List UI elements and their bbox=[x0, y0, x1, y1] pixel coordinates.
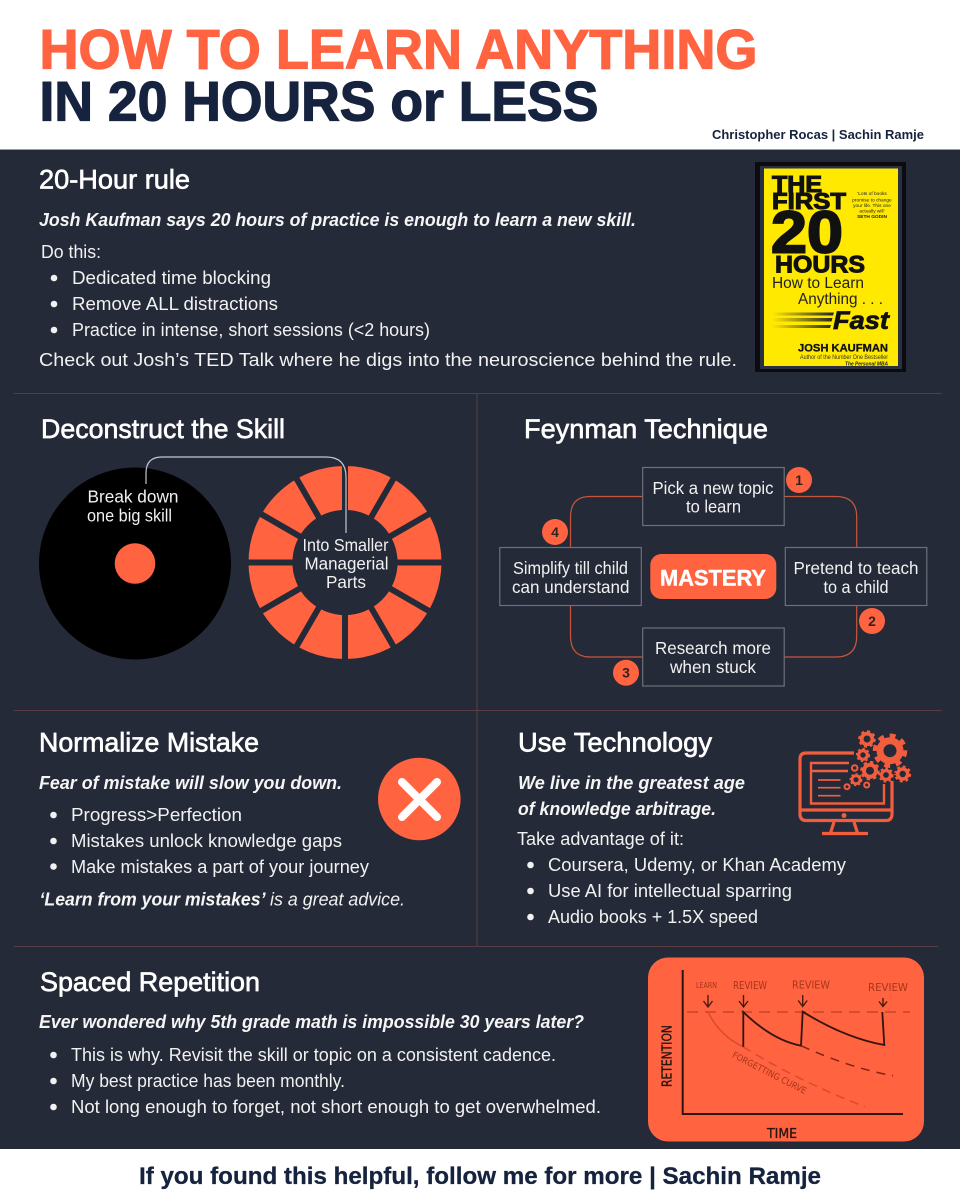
book cover bbox=[755, 162, 906, 372]
axis title: time: TIME bbox=[766, 1126, 797, 1142]
book cover: SETH GODIN bbox=[857, 214, 887, 220]
number 3 bbox=[613, 660, 639, 686]
heading: Use Technology bbox=[518, 728, 713, 758]
heading: Feynman Technique bbox=[524, 414, 768, 444]
TED talk note: Check out Josh’s TED Talk where he digs into the neuroscience behind the rule. bbox=[39, 350, 737, 370]
segmented ring bbox=[245, 462, 445, 662]
bullet list: Not long enough to forget, not short enough to get overwhelmed. bbox=[71, 1096, 601, 1117]
bullet list: Mistakes unlock knowledge gaps bbox=[71, 830, 342, 851]
step box 3 bbox=[643, 628, 784, 686]
bullet list bbox=[50, 1044, 601, 1117]
retention target line bbox=[687, 1011, 910, 1013]
hand labels: LEARN bbox=[696, 981, 717, 990]
hand labels bbox=[696, 980, 909, 1097]
label: smaller parts: Parts bbox=[326, 572, 366, 592]
connector bbox=[146, 457, 346, 533]
axis title: retention: RETENTION bbox=[660, 1025, 676, 1087]
bullet list bbox=[50, 804, 370, 877]
bullet list: This is why. Revisit the skill or topic on a consistent cadence. bbox=[71, 1044, 556, 1065]
review curves bbox=[743, 1012, 884, 1047]
arrows bbox=[704, 995, 887, 1007]
gears bbox=[844, 732, 910, 789]
bullet list: Audio books + 1.5X speed bbox=[548, 906, 758, 927]
subheading: Fear of mistake will slow you down. bbox=[39, 772, 342, 793]
book cover: THE bbox=[772, 171, 822, 197]
book cover: promise to change bbox=[852, 198, 892, 204]
panel: use technology bbox=[517, 728, 910, 927]
book cover: JOSH KAUFMAN bbox=[798, 342, 888, 354]
label: break down: Break down bbox=[88, 486, 178, 506]
bullet list: Practice in intense, short sessions (<2 hours) bbox=[72, 319, 430, 340]
footer: If you found this helpful, follow me for more | Sachin Ramje bbox=[139, 1163, 821, 1190]
number 1: 1 bbox=[795, 472, 803, 488]
closing note: is a great advice. bbox=[270, 888, 405, 910]
bullet list: Remove ALL distractions bbox=[72, 293, 278, 314]
bullet list: Use AI for intellectual sparring bbox=[548, 880, 792, 901]
number 2: 2 bbox=[868, 613, 876, 629]
book cover: your life. This one bbox=[853, 203, 891, 209]
do this label: Do this: bbox=[41, 241, 101, 262]
step box 4: Simplify till child bbox=[513, 558, 628, 578]
orange centre dot bbox=[115, 543, 155, 584]
cycle connector bbox=[570, 496, 857, 657]
subheading: Ever wondered why 5th grade math is impossible 30 years later? bbox=[39, 1011, 584, 1032]
book cover: ‘Lots of books bbox=[857, 191, 887, 197]
bullet list: Make mistakes a part of your journey bbox=[71, 856, 370, 877]
book cover: HOURS bbox=[775, 252, 865, 278]
step box 2: Pretend to teach bbox=[794, 558, 918, 578]
axes bbox=[683, 970, 903, 1114]
book cover: Fast bbox=[833, 307, 891, 335]
bullet list bbox=[51, 267, 430, 340]
book cover: Anything . . . bbox=[798, 291, 883, 308]
hand labels: REVIEW bbox=[792, 980, 831, 992]
icon: computer with gears bbox=[800, 732, 910, 834]
hand labels: REVIEW bbox=[868, 982, 909, 994]
authors: Christopher Rocas | Sachin Ramje bbox=[712, 128, 924, 142]
step box 2: to a child bbox=[824, 577, 888, 597]
label: smaller parts bbox=[302, 535, 389, 592]
label: break down bbox=[87, 486, 178, 526]
heading: Deconstruct the Skill bbox=[41, 414, 285, 444]
icon: x mark bbox=[378, 758, 461, 840]
panel: 20-hour rule bbox=[39, 164, 737, 370]
step box 3: when stuck bbox=[669, 657, 756, 677]
step box 2 bbox=[785, 548, 927, 606]
label: break down: one big skill bbox=[87, 506, 172, 526]
book cover: How to Learn bbox=[772, 275, 864, 292]
title line 1: HOW TO LEARN ANYTHING bbox=[40, 18, 758, 80]
forgetting curve chart bbox=[648, 958, 924, 1142]
subheading: of knowledge arbitrage. bbox=[518, 798, 716, 819]
number 4: 4 bbox=[551, 524, 559, 540]
intro line: Take advantage of it: bbox=[517, 828, 684, 849]
bullet list: Dedicated time blocking bbox=[72, 267, 271, 288]
heading: 20-Hour rule bbox=[39, 164, 190, 194]
step box 1: to learn bbox=[686, 496, 741, 516]
subheading: Josh Kaufman says 20 hours of practice is enough to learn a new skill. bbox=[39, 209, 636, 230]
bullet list: Progress>Perfection bbox=[71, 804, 242, 825]
step box 3: Research more bbox=[655, 638, 771, 658]
hand labels: FORGETTING CURVE bbox=[730, 1051, 808, 1097]
book cover: 20 bbox=[771, 200, 843, 266]
mastery badge: MASTERY bbox=[660, 566, 766, 590]
number 3: 3 bbox=[622, 665, 630, 681]
book cover: The Personal MBA bbox=[845, 362, 888, 368]
panel: deconstruct the skill bbox=[39, 414, 445, 662]
forgetting curve bbox=[708, 1012, 743, 1047]
bullet list: My best practice has been monthly. bbox=[71, 1070, 345, 1091]
number 1 bbox=[786, 467, 812, 493]
step box 4: can understand bbox=[512, 577, 630, 597]
label: smaller parts: Into Smaller bbox=[302, 535, 389, 555]
footer bbox=[0, 1149, 960, 1200]
bullet list bbox=[527, 854, 847, 927]
heading: Normalize Mistake bbox=[39, 728, 259, 758]
book cover: FIRST bbox=[772, 188, 846, 214]
big black circle bbox=[39, 468, 231, 660]
subheading: We live in the greatest age bbox=[518, 772, 745, 793]
heading: Spaced Repetition bbox=[40, 967, 260, 997]
title line 2: IN 20 HOURS or LESS bbox=[40, 70, 598, 132]
panel: feynman technique bbox=[500, 414, 927, 686]
closing note: ‘Learn from your mistakes’ bbox=[40, 888, 266, 910]
book cover: Author of the Number One Bestseller bbox=[800, 355, 888, 361]
header bbox=[0, 0, 960, 150]
number 2 bbox=[859, 608, 885, 634]
book cover: actually will’ bbox=[859, 208, 885, 214]
subheading bbox=[518, 772, 745, 819]
step box 1: Pick a new topic bbox=[652, 478, 774, 498]
number 4 bbox=[542, 519, 568, 545]
step box 1 bbox=[643, 468, 784, 526]
closing note bbox=[40, 888, 405, 910]
step box 4 bbox=[500, 548, 641, 606]
mastery badge bbox=[650, 554, 776, 599]
panel: normalize mistake bbox=[39, 728, 461, 910]
hand labels: REVIEW bbox=[733, 980, 768, 992]
bullet list: Coursera, Udemy, or Khan Academy bbox=[548, 854, 847, 875]
panel: spaced repetition bbox=[39, 958, 924, 1142]
label: smaller parts: Managerial bbox=[304, 554, 388, 574]
